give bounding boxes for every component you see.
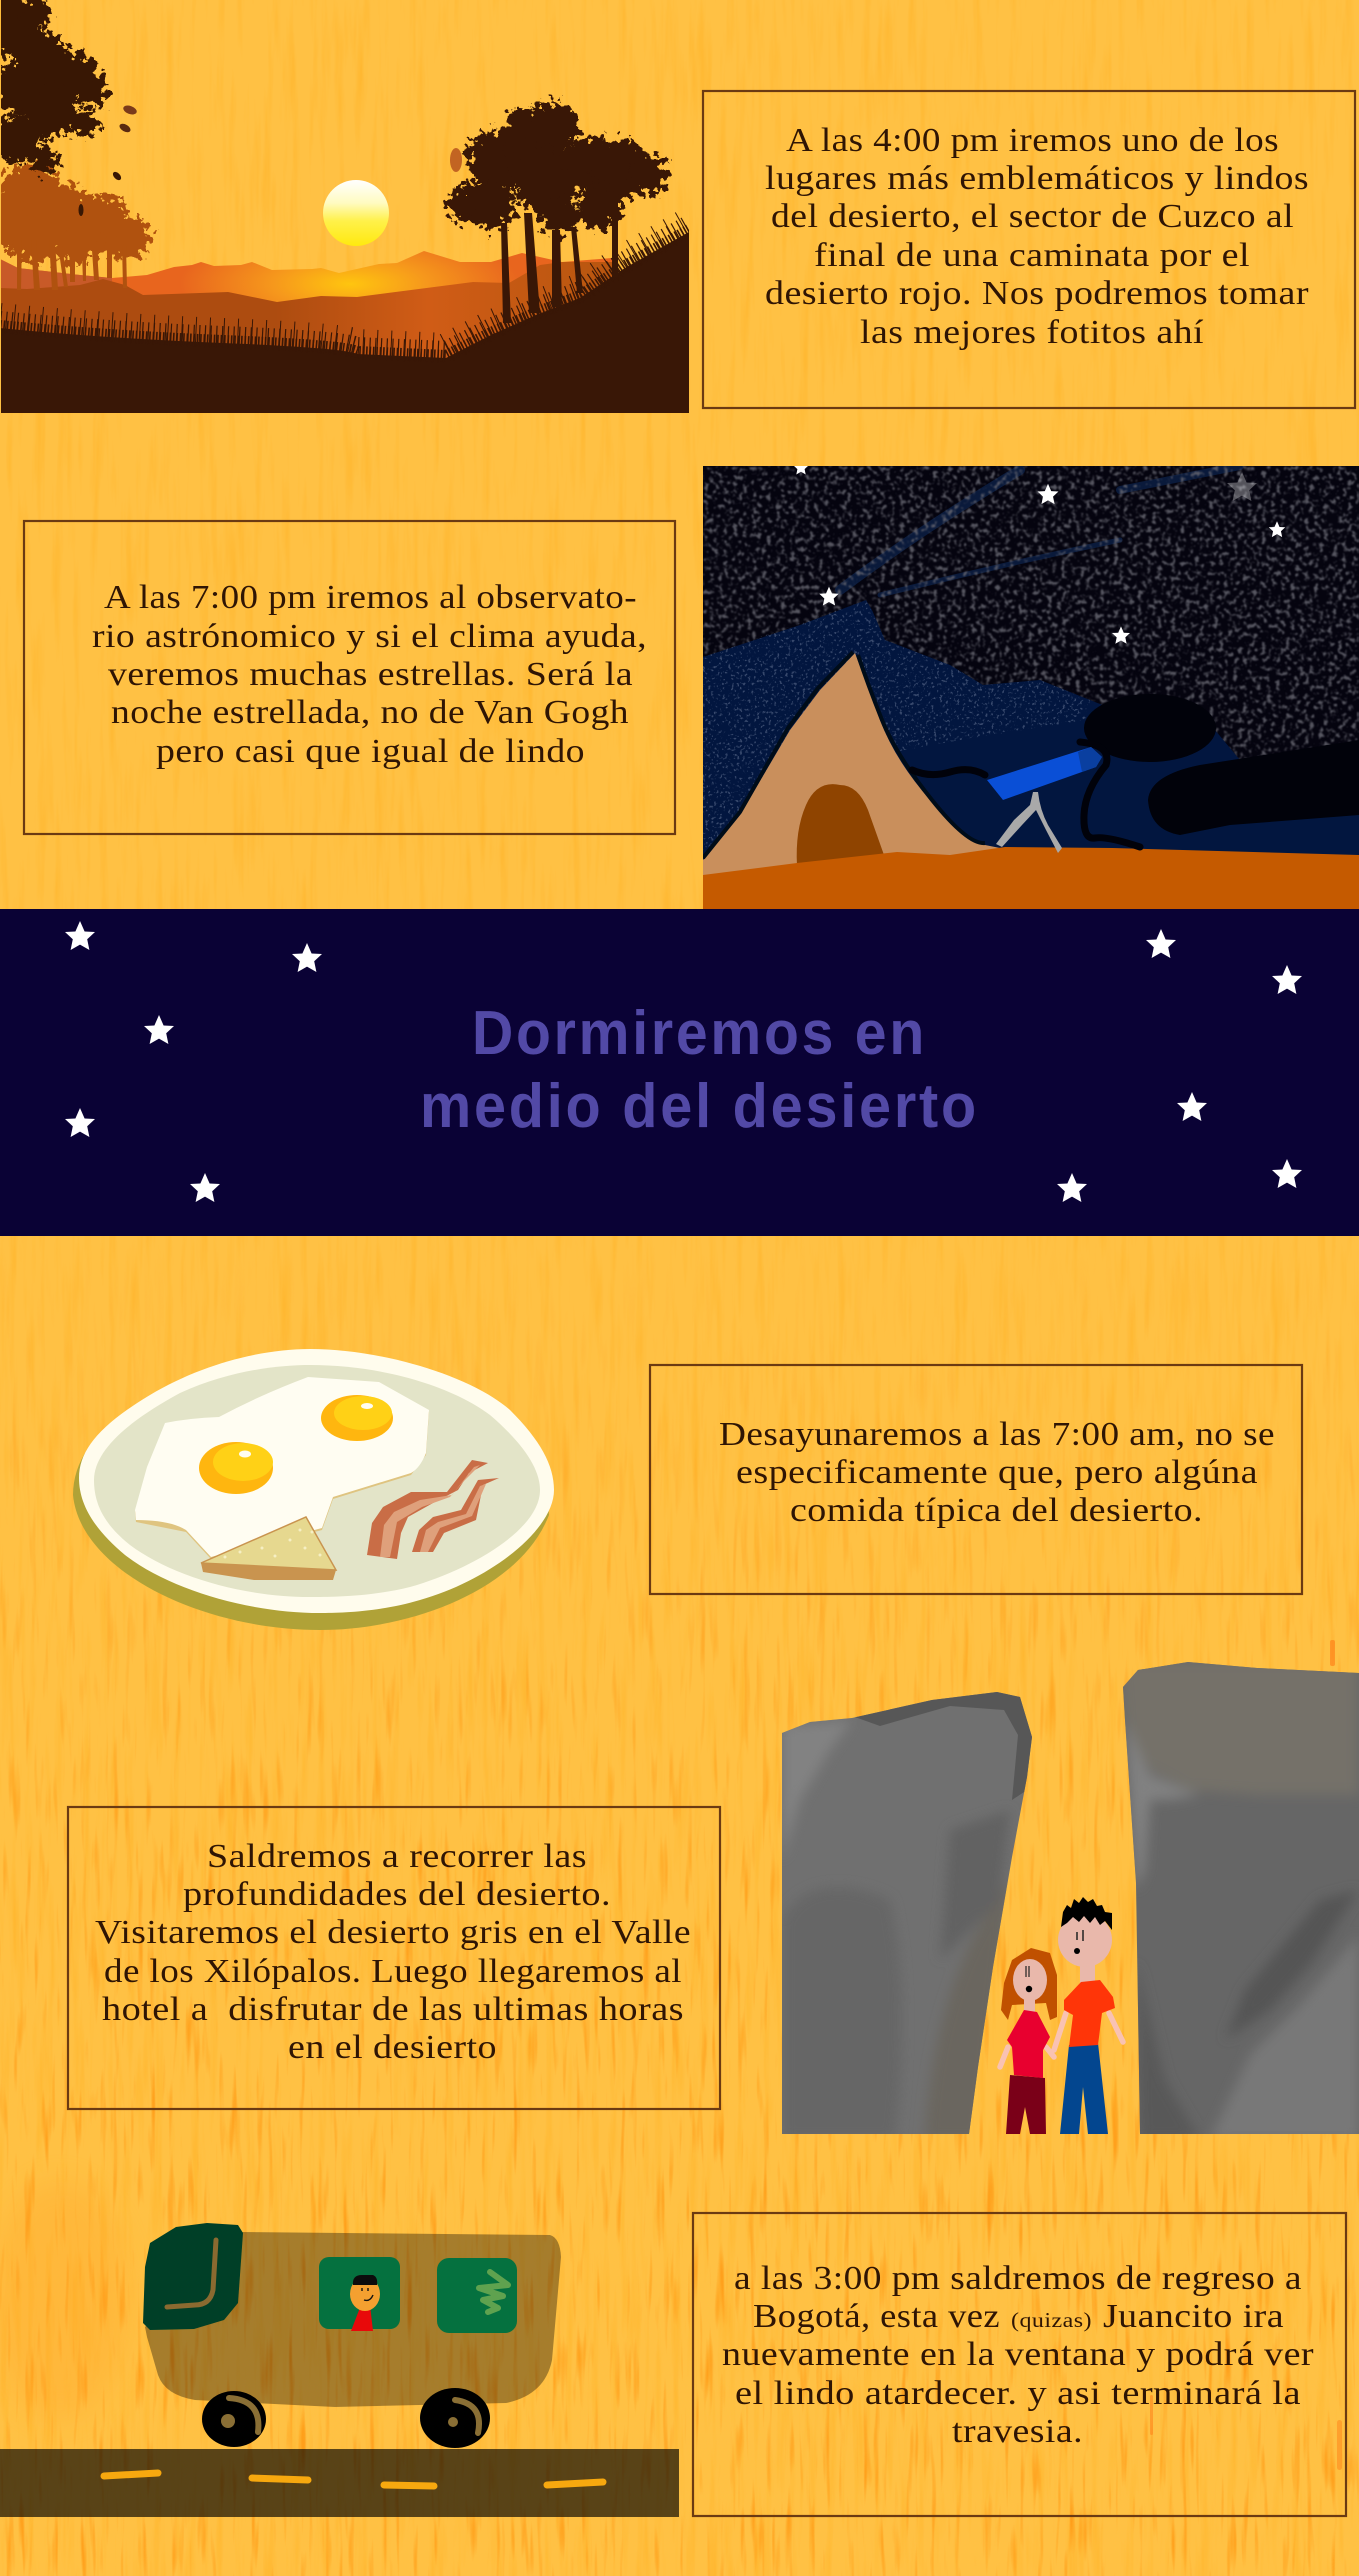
illustration: night sky with tent and telescope — [703, 460, 1359, 909]
illustration: sunset landscape — [0, 0, 689, 413]
text box: return to Bogotá: travesia. — [952, 2413, 1083, 2450]
text box: 4:00 pm Cuzco: A las 4:00 pm iremos uno de los — [786, 122, 1279, 159]
illustration: grey desert rocks with couple — [782, 1660, 1359, 2140]
night sky base — [703, 466, 1359, 909]
plate centre — [94, 1365, 540, 1597]
text box: grey desert — [68, 1807, 720, 2109]
bus cab window — [143, 2223, 243, 2330]
sun — [323, 180, 389, 246]
text box: grey desert: de los Xilópalos. Luego llegaremos al — [104, 1953, 682, 1990]
text box: return to Bogotá: nuevamente en la ventana y podrá ver — [722, 2336, 1314, 2373]
ground — [703, 847, 1359, 909]
text box: grey desert: en el desierto — [288, 2029, 497, 2066]
text box: 4:00 pm Cuzco: las mejores fotitos ahí — [860, 314, 1204, 351]
text box: grey desert: Visitaremos el desierto gris en el Valle — [95, 1914, 691, 1951]
banner: night — [0, 909, 1359, 1236]
banner heading — [420, 999, 979, 1141]
text box: breakfast: comida típica del desierto. — [790, 1492, 1203, 1529]
left mountain shade — [1, 260, 112, 289]
text box: 7:00 pm observatory: noche estrellada, no de Van Gogh — [111, 694, 629, 731]
far mountains — [1, 251, 612, 302]
text box: return to Bogotá: el lindo atardecer. y asi terminará la — [735, 2375, 1301, 2412]
yolk left — [199, 1442, 273, 1494]
text box: grey desert: profundidades del desierto. — [183, 1876, 611, 1913]
telescope — [987, 747, 1102, 853]
text box: breakfast — [650, 1365, 1302, 1594]
rear wheel — [420, 2388, 490, 2448]
tent — [703, 653, 1010, 878]
text box: grey desert: hotel a disfrutar de las ultimas horas — [102, 1991, 684, 2028]
road — [0, 2449, 679, 2517]
boy — [1054, 1897, 1123, 2134]
window with passenger — [319, 2257, 400, 2331]
illustration: breakfast plate — [73, 1349, 554, 1630]
text box: return to Bogotá: Bogotá, esta vez — [753, 2298, 1000, 2335]
front wheel — [202, 2391, 266, 2447]
plate rim — [79, 1349, 554, 1613]
ground with grass — [0, 222, 689, 413]
text box: return to Bogotá: (quizas) — [1011, 2308, 1092, 2332]
faint speckle on navy — [703, 590, 1123, 860]
text box: return to Bogotá: a las 3:00 pm saldremos de regreso a — [734, 2260, 1302, 2297]
text box: return to Bogotá: Juancito ira — [1103, 2298, 1284, 2335]
bright stars — [794, 460, 1285, 644]
right rock — [1120, 1660, 1359, 2140]
text box: return to Bogotá — [693, 2213, 1346, 2516]
tent door — [797, 784, 884, 868]
text box: 7:00 pm observatory: veremos muchas estrellas. Será la — [108, 656, 633, 693]
text box: 7:00 pm observatory: rio astrónomico y si el clima ayuda, — [92, 618, 647, 655]
text box: 7:00 pm observatory — [24, 521, 675, 834]
yolk right — [321, 1395, 393, 1441]
text box: 4:00 pm Cuzco: lugares más emblemáticos y lindos — [765, 160, 1309, 197]
text box: 4:00 pm Cuzco: desierto rojo. Nos podremos tomar — [765, 275, 1309, 312]
illustration: bus on road — [0, 2223, 679, 2517]
text box: 7:00 pm observatory: pero casi que igual de lindo — [156, 733, 585, 770]
girl — [1000, 1948, 1057, 2134]
bacon — [367, 1460, 499, 1559]
text box: grey desert: Saldremos a recorrer las — [207, 1838, 587, 1875]
star speckle — [703, 466, 1359, 776]
left rock — [782, 1690, 1042, 2140]
bus body — [145, 2232, 561, 2407]
milky way streaks — [840, 466, 1240, 595]
back trees — [0, 164, 150, 290]
egg whites — [135, 1377, 429, 1559]
right trees — [448, 102, 668, 323]
dark starry region — [703, 466, 1359, 768]
plate shadow — [73, 1366, 549, 1630]
text box: 4:00 pm Cuzco — [703, 91, 1355, 408]
text box: 4:00 pm Cuzco: del desierto, el sector de Cuzco al — [771, 198, 1294, 235]
near hills — [0, 262, 612, 360]
gray star — [1227, 472, 1257, 501]
black clouds — [1084, 694, 1359, 835]
road dashes — [104, 2473, 603, 2486]
toast — [201, 1517, 336, 1580]
text box: breakfast: especificamente que, pero algúna — [736, 1454, 1258, 1491]
left big tree — [0, 0, 138, 216]
banner heading: medio del desierto — [420, 1072, 979, 1141]
text box: 7:00 pm observatory: A las 7:00 pm iremos al observato- — [104, 579, 637, 616]
tent outline — [703, 652, 985, 858]
black ink lines — [912, 742, 1140, 847]
second window — [437, 2258, 517, 2333]
banner stars — [65, 921, 1302, 1202]
text box: 4:00 pm Cuzco: final de una caminata por el — [814, 237, 1250, 274]
text box: breakfast: Desayunaremos a las 7:00 am, no se — [719, 1416, 1275, 1453]
banner heading: Dormiremos en — [472, 999, 927, 1068]
